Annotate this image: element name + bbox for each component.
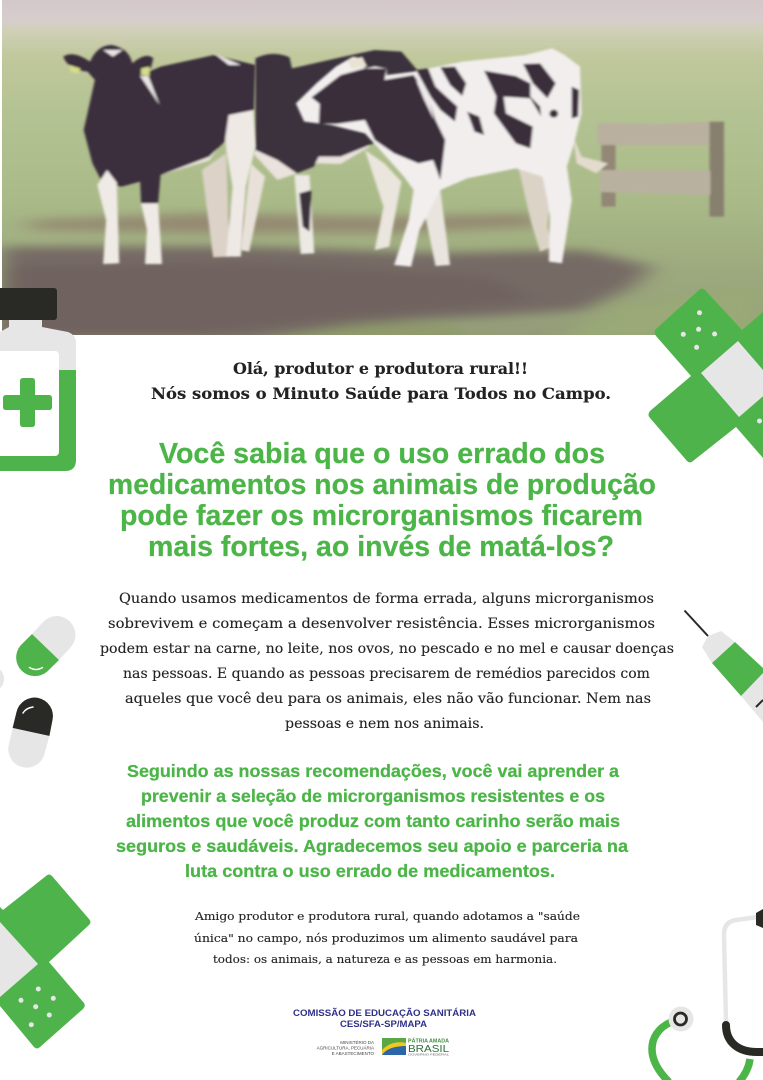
greeting heading bbox=[151, 359, 611, 403]
photo: cows in a pasture bbox=[0, 0, 763, 340]
ministry label: E ABASTECIMENTO bbox=[332, 1051, 374, 1056]
footer: commission name: CES/SFA-SP/MAPA bbox=[340, 1019, 428, 1029]
green recommendation paragraph: alimentos que você produz com tanto carinho serão mais bbox=[126, 811, 620, 831]
cow: left, dark bbox=[63, 45, 255, 264]
icon: green cross bbox=[3, 378, 52, 427]
icon: bandage bottom left bbox=[0, 874, 90, 1048]
icon: syringe bbox=[684, 610, 763, 722]
main green question heading: medicamentos nos animais de produção bbox=[108, 469, 656, 501]
greeting heading: Olá, produtor e produtora rural!! bbox=[233, 359, 528, 378]
footer: commission name bbox=[293, 1008, 477, 1029]
green recommendation paragraph: prevenir a seleção de microrganismos resistentes e os bbox=[141, 786, 605, 806]
closing paragraph on saúde única bbox=[194, 909, 580, 966]
body text paragraph: sobrevivem e começam a desenvolver resistência. Esses microrganismos bbox=[108, 616, 655, 632]
icon: green and grey capsule bbox=[16, 616, 75, 676]
ministry label: AGRICULTURA, PECUÁRIA bbox=[317, 1044, 374, 1050]
icon: partial pill at left edge bbox=[0, 666, 4, 692]
cow: middle, dark bbox=[240, 50, 418, 254]
Pátria Amada Brasil wordmark bbox=[408, 1038, 450, 1056]
main green question heading: pode fazer os microrganismos ficarem bbox=[120, 500, 643, 532]
icon: medicine bottle bbox=[0, 288, 76, 471]
body text paragraph bbox=[100, 591, 674, 732]
greeting heading: Nós somos o Minuto Saúde para Todos no Campo. bbox=[151, 384, 611, 403]
green recommendation paragraph: Seguindo as nossas recomendações, você vai aprender a bbox=[127, 761, 619, 781]
main green question heading: mais fortes, ao invés de matá-los? bbox=[148, 531, 614, 563]
green recommendation paragraph: seguros e saudáveis. Agradecemos seu apoio e parceria na bbox=[116, 836, 628, 856]
Pátria Amada Brasil wordmark: BRASIL bbox=[408, 1043, 449, 1055]
icon: stethoscope bbox=[652, 909, 763, 1080]
body text paragraph: Quando usamos medicamentos de forma errada, alguns microrganismos bbox=[119, 591, 654, 607]
ministry label bbox=[317, 1039, 374, 1056]
main green question heading bbox=[108, 438, 656, 563]
Pátria Amada Brasil wordmark: PÁTRIA AMADA bbox=[408, 1038, 449, 1044]
body text paragraph: pessoas e nem nos animais. bbox=[285, 716, 484, 732]
closing paragraph on saúde única: Amigo produtor e produtora rural, quando adotamos a "saúde bbox=[194, 909, 580, 923]
closing paragraph on saúde única: única" no campo, nós produzimos um alimento saudável para bbox=[194, 931, 578, 945]
green recommendation paragraph: luta contra o uso errado de medicamentos. bbox=[185, 861, 555, 881]
closing paragraph on saúde única: todos: os animais, a natureza e as pessoas em harmonia. bbox=[213, 952, 557, 966]
icon: bandage top right bbox=[648, 288, 763, 466]
main green question heading: Você sabia que o uso errado dos bbox=[159, 438, 605, 470]
footer: commission name: COMISSÃO DE EDUCAÇÃO SANITÁRIA bbox=[293, 1008, 477, 1018]
ground: dirt patch bbox=[0, 213, 763, 340]
footer: government logos bbox=[317, 1038, 450, 1056]
ministry label: MINISTÉRIO DA bbox=[340, 1039, 374, 1045]
icon: Brazil flag mark bbox=[382, 1038, 406, 1055]
body text paragraph: podem estar na carne, no leite, nos ovos, no pescado e no mel e causar doenças bbox=[100, 641, 674, 657]
body text paragraph: aqueles que você deu para os animais, eles não vão funcionar. Nem nas bbox=[125, 691, 651, 707]
green recommendation paragraph bbox=[116, 761, 628, 881]
cow: right, white with spots bbox=[296, 48, 608, 267]
body text paragraph: nas pessoas. E quando as pessoas precisarem de remédios parecidos com bbox=[123, 666, 650, 682]
Pátria Amada Brasil wordmark: GOVERNO FEDERAL bbox=[408, 1054, 450, 1056]
fence bbox=[598, 122, 724, 217]
icon: black and grey capsule bbox=[8, 698, 53, 768]
